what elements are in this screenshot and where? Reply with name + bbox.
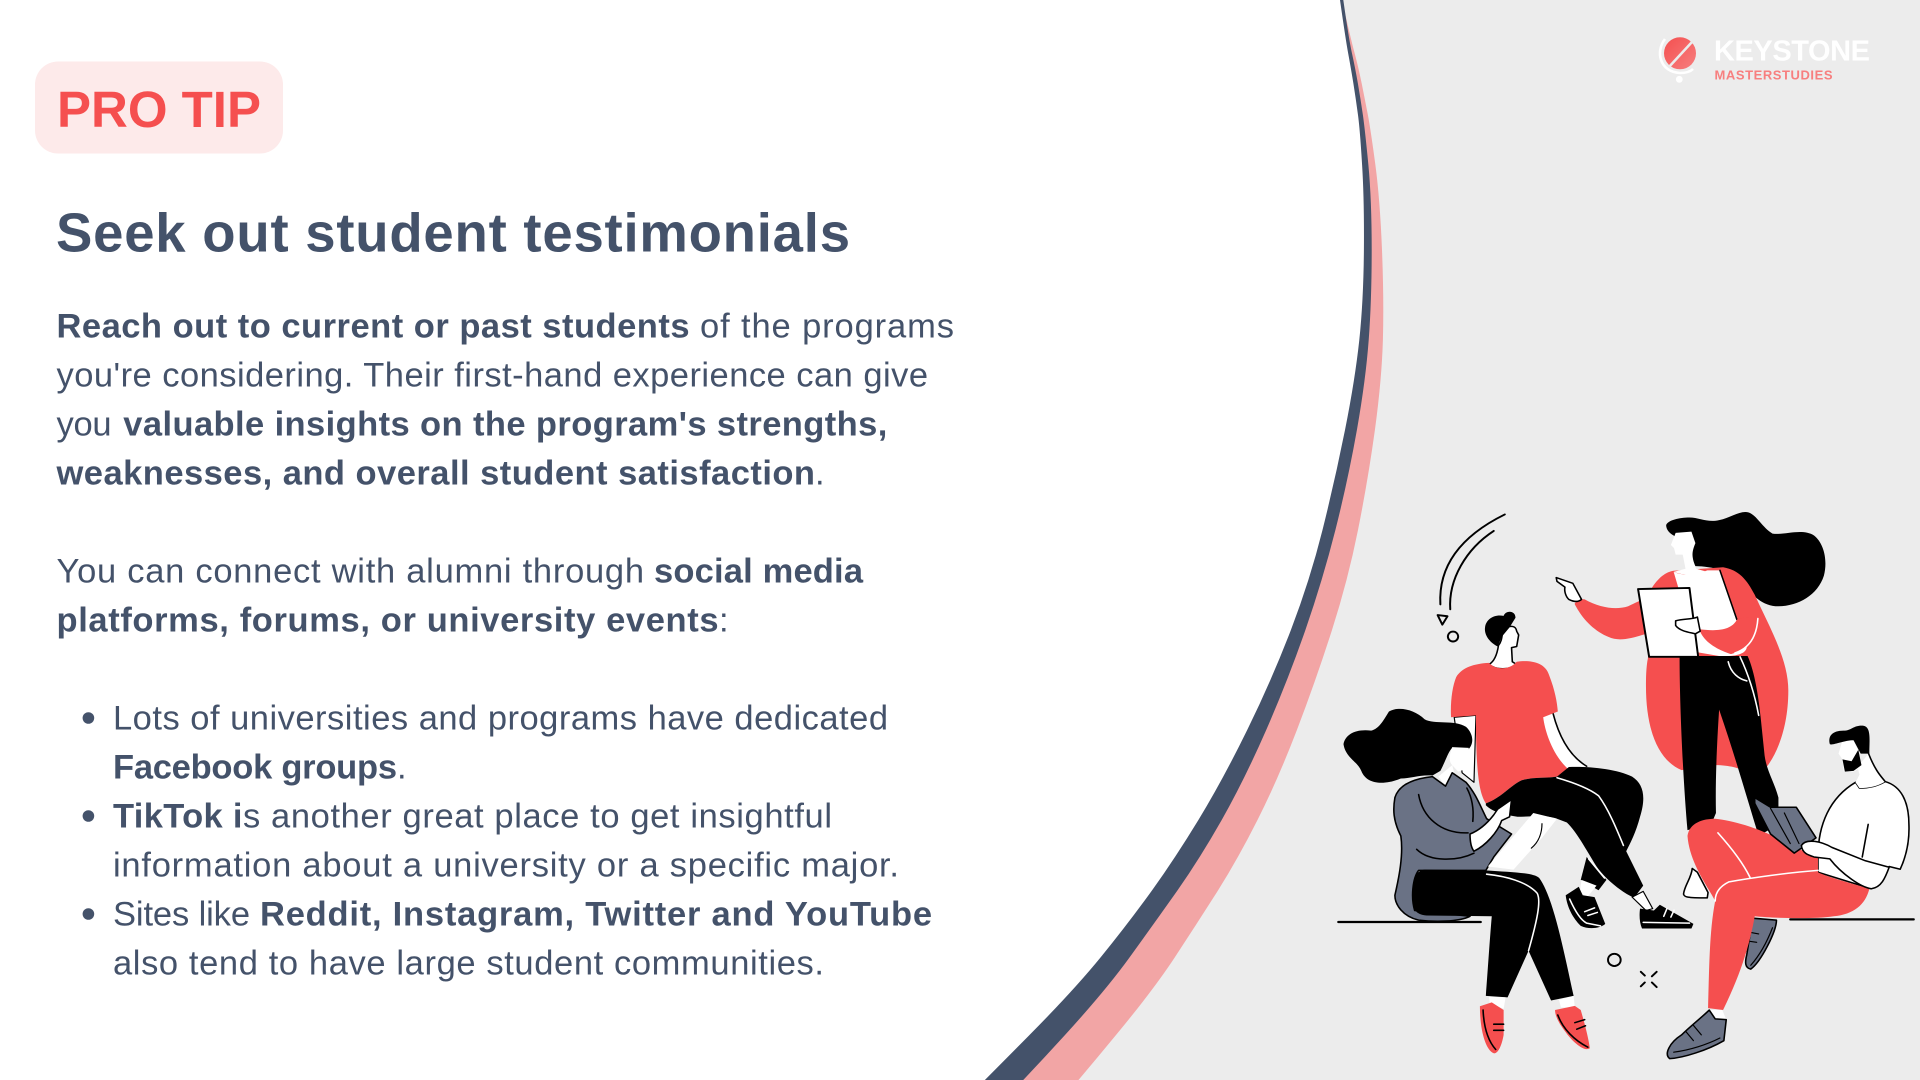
pants xyxy=(1680,656,1778,836)
curve: pink band xyxy=(0,0,1383,1080)
face xyxy=(1438,747,1469,786)
pants xyxy=(1413,870,1574,1000)
figure: sitting man in red xyxy=(1451,612,1693,929)
red shoes xyxy=(1480,1002,1590,1053)
bullet two: TikTok i xyxy=(113,798,242,836)
book xyxy=(1755,798,1816,853)
sweater folds xyxy=(1417,788,1474,859)
near shoe xyxy=(1640,905,1693,929)
shirt xyxy=(1674,570,1747,656)
icon: globe xyxy=(1660,37,1696,83)
text block: paragraph two: social media xyxy=(654,553,864,591)
far lower leg xyxy=(1581,857,1606,890)
bullet one: Facebook groups xyxy=(113,749,397,787)
list: bullet points xyxy=(83,700,932,983)
ground line: left xyxy=(1338,919,1481,925)
near arm xyxy=(1543,713,1587,769)
panel: grey right background xyxy=(900,0,1920,1080)
text block: paragraph one: you're considering. Their first-hand experience can give xyxy=(56,357,928,395)
bullet one: . xyxy=(397,749,407,787)
text block: paragraph one xyxy=(56,308,954,493)
bullet one xyxy=(83,700,888,787)
arm and hand xyxy=(1470,800,1512,851)
face xyxy=(1839,740,1861,772)
pointing hand xyxy=(1556,578,1582,601)
shoe xyxy=(1684,868,1708,898)
logo: Keystone Masterstudies xyxy=(1660,36,1870,83)
forearm xyxy=(1699,618,1759,654)
bullet one: Lots of universities and programs have dedicated xyxy=(113,700,888,738)
panel: white left background xyxy=(0,0,1364,1080)
tablet xyxy=(1638,588,1698,657)
hand xyxy=(1676,617,1700,634)
figure: standing woman xyxy=(1556,512,1825,898)
arm and hand xyxy=(1801,841,1889,889)
ground line: right xyxy=(1790,916,1914,922)
sweater xyxy=(1394,773,1512,921)
text block: paragraph two: platforms, forums, or university events xyxy=(56,602,718,640)
pants details xyxy=(1728,657,1759,715)
heading: Seek out student testimonials xyxy=(56,202,850,264)
bullet three: Sites like xyxy=(113,896,250,934)
beard xyxy=(1842,750,1861,772)
far sock xyxy=(1580,880,1597,898)
far arm xyxy=(1454,715,1476,782)
bullet two xyxy=(83,798,899,885)
decoration: arcs, triangle and circles xyxy=(1438,514,1657,987)
red pants xyxy=(1687,819,1869,1010)
logo sub-wordmark: MASTERSTUDIES xyxy=(1714,68,1833,83)
second hand xyxy=(1531,824,1542,848)
shirt xyxy=(1818,782,1909,889)
sock xyxy=(1709,1010,1726,1020)
bullet three: Reddit, Instagram, Twitter and YouTube xyxy=(260,896,932,934)
curve: navy band xyxy=(0,0,1372,1080)
pants lines xyxy=(1715,833,1818,901)
cardigan xyxy=(1646,567,1788,770)
hair xyxy=(1666,512,1825,606)
text block: paragraph one: of the programs xyxy=(700,308,954,346)
shirt xyxy=(1451,661,1568,803)
text block: paragraph one: Reach out to current or past students xyxy=(56,308,690,346)
badge: pro tip: PRO TIP xyxy=(57,81,261,138)
neck and face xyxy=(1489,626,1519,669)
illustration: students talking xyxy=(1338,512,1914,1059)
head xyxy=(1671,532,1707,575)
pointing arm xyxy=(1575,599,1648,639)
logo wordmark: KEYSTONE xyxy=(1714,36,1870,68)
bullet three xyxy=(83,896,932,983)
hair xyxy=(1485,612,1515,646)
text block: paragraph two: You can connect with alumni through xyxy=(56,553,644,591)
front shoe xyxy=(1667,1010,1726,1059)
bullet two: information about a university or a specific major. xyxy=(113,847,899,885)
figure: sitting woman in grey xyxy=(1343,709,1590,1053)
badge: pro tip xyxy=(35,62,283,154)
far shoe xyxy=(1566,887,1605,928)
text block: paragraph two xyxy=(56,553,864,640)
text block: paragraph one: valuable insights on the program's strengths, xyxy=(123,406,887,444)
rear shoe xyxy=(1746,918,1776,969)
hair xyxy=(1829,726,1870,754)
bullet three: also tend to have large student communities. xyxy=(113,945,824,983)
bullet two: s another great place to get insightful xyxy=(243,798,832,836)
text block: paragraph two: : xyxy=(719,602,729,640)
pants xyxy=(1486,767,1643,898)
laptop xyxy=(1488,813,1557,870)
figure: sitting man in white xyxy=(1667,726,1909,1059)
text block: paragraph one: weaknesses, and overall student satisfaction xyxy=(56,455,815,493)
neck xyxy=(1856,754,1885,788)
hair xyxy=(1343,709,1472,783)
near sock xyxy=(1632,891,1653,911)
text block: paragraph one: you xyxy=(56,406,112,444)
text block: paragraph one: . xyxy=(815,455,825,493)
socks xyxy=(1489,996,1575,1009)
